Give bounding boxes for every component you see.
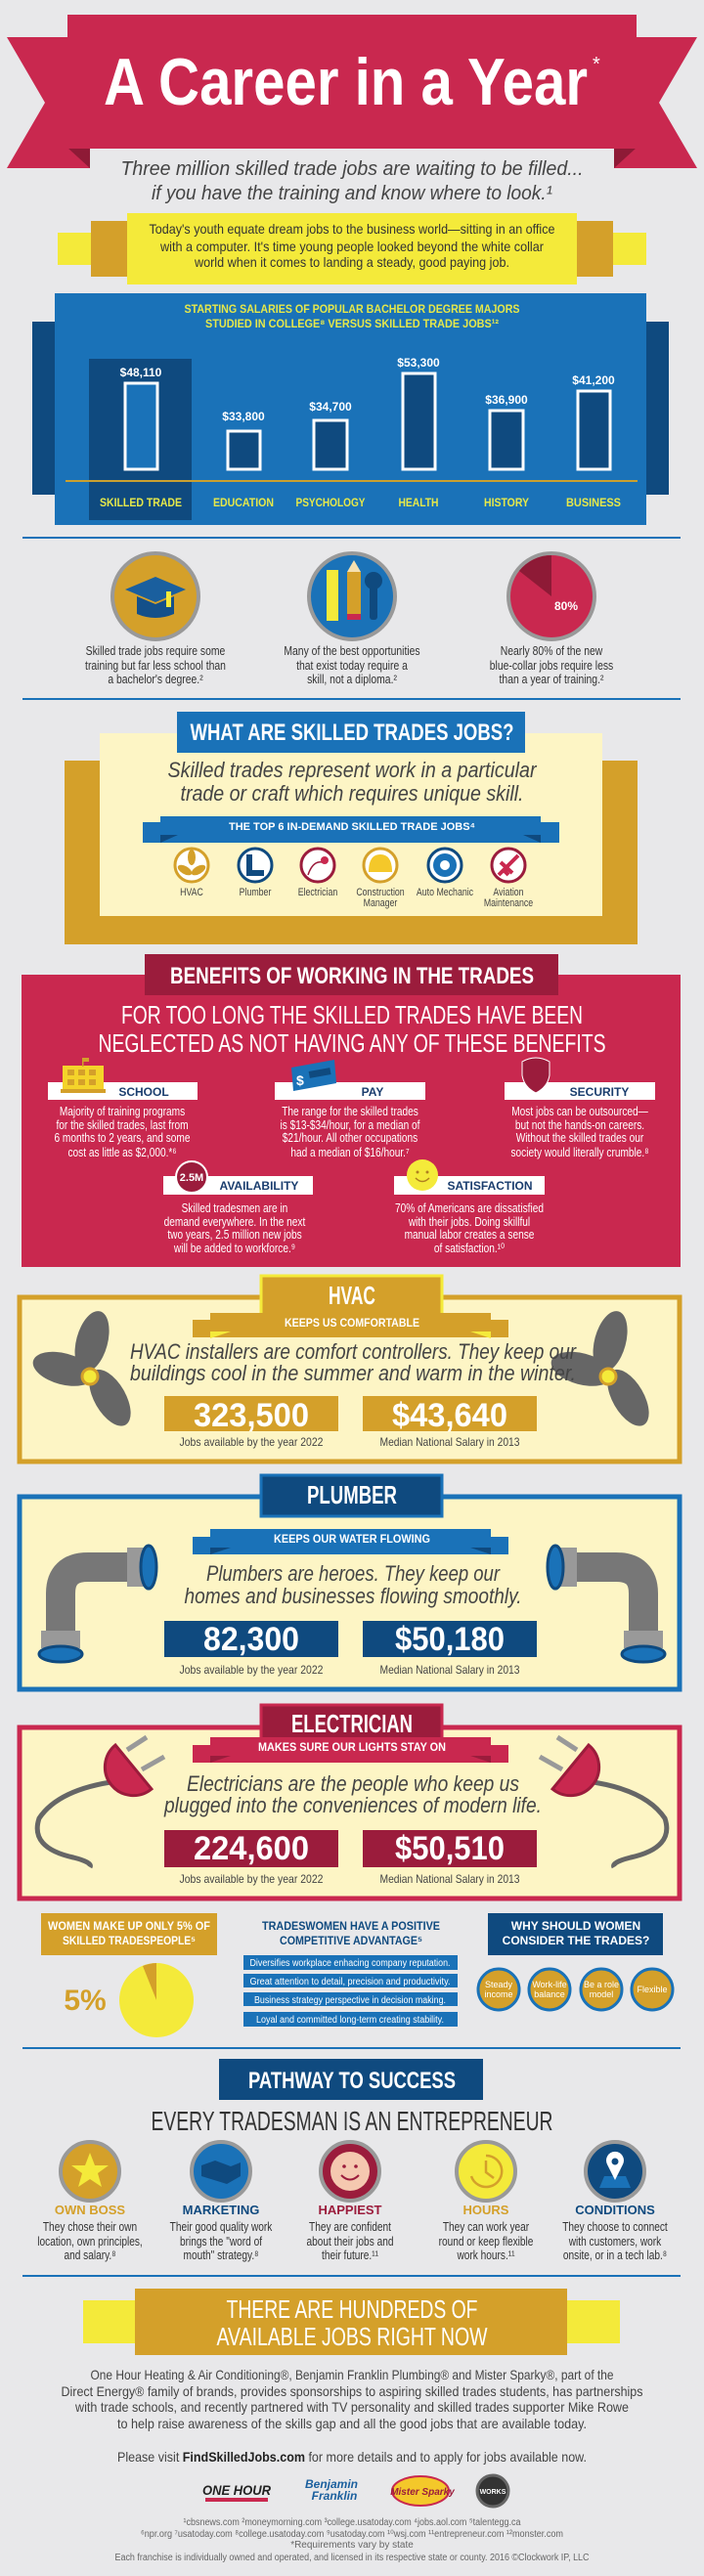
icons: six trades: Maintenance: [484, 897, 534, 909]
description: plugged into the conveniences of modern life.: [163, 1793, 542, 1817]
header tab: KEEPS US COMFORTABLE: [285, 1316, 419, 1330]
benefit: availability: demand everywhere. In the next: [164, 1215, 306, 1229]
description: Plumbers are heroes. They keep our: [206, 1561, 501, 1586]
description: Electricians are the people who keep us: [187, 1771, 519, 1796]
bar chart: starting salaries: $53,300: [397, 356, 440, 370]
benefit: satisfaction: of satisfaction.¹⁰: [434, 1242, 505, 1255]
description: HVAC installers are comfort controllers. They keep our: [130, 1339, 577, 1364]
stat: graduation cap: a bachelor's degree.²: [108, 673, 203, 686]
benefit: availability: Skilled tradesmen are in: [182, 1201, 287, 1215]
subtitle: Three million skilled trade jobs are waiting to be filled...: [121, 158, 583, 180]
callout: hundreds of jobs: THERE ARE HUNDREDS OF: [227, 2294, 477, 2324]
header tab: [193, 1705, 508, 1763]
bar chart: starting salaries: PSYCHOLOGY: [295, 496, 366, 509]
header tab: [193, 1276, 508, 1338]
why women consider trades: balance: [534, 1989, 565, 1999]
sponsor paragraph: Direct Energy® family of brands, provides sponsorships to aspiring skilled trades students, has partnerships: [61, 2383, 643, 2399]
benefit: satisfaction: manual labor creates a sense: [405, 1228, 534, 1242]
pathway items: mouth" strategy.⁸: [184, 2249, 259, 2262]
tradeswomen advantages: COMPETITIVE ADVANTAGE⁵: [280, 1934, 422, 1947]
pathway items: They chose their own: [43, 2220, 137, 2234]
tradeswomen advantages: Business strategy perspective in decision making.: [254, 1995, 446, 2006]
pathway items: onsite, or in a tech lab.⁸: [563, 2249, 667, 2262]
benefit: pay: $21/hour. All other occupations: [283, 1131, 418, 1145]
description: buildings cool in the summer and warm in the winter.: [130, 1361, 576, 1385]
callout: hundreds of jobs: AVAILABLE JOBS RIGHT NOW: [217, 2322, 488, 2351]
icon: pipe left: [39, 1546, 156, 1662]
header tab: [193, 1475, 508, 1554]
tradeswomen advantages: TRADESWOMEN HAVE A POSITIVE: [262, 1919, 440, 1933]
benefit: satisfaction: with their jobs. Doing skillful: [408, 1215, 530, 1229]
panel: benefits: [22, 954, 681, 1267]
benefit: satisfaction: 70% of Americans are dissatisfied: [395, 1201, 544, 1215]
tradeswomen advantages: Diversifies workplace enhacing company reputation.: [250, 1958, 450, 1969]
header tab: PLUMBER: [307, 1480, 397, 1509]
pie chart 5%: [119, 1963, 194, 2037]
stats: Jobs available by the year 2022: [180, 1872, 324, 1886]
stat: 80% pie: 80%: [554, 599, 578, 613]
heading: [145, 954, 558, 995]
chart title: STUDIED IN COLLEGE⁸ VERSUS SKILLED TRADE JOBS¹²: [205, 317, 499, 330]
title banner: *: [593, 54, 600, 75]
women 5%: WOMEN MAKE UP ONLY 5% OF: [48, 1919, 210, 1933]
bar chart: starting salaries: $33,800: [222, 410, 265, 423]
stat: 80% pie: than a year of training.²: [500, 673, 604, 686]
stat: 80% pie: [490, 553, 613, 686]
description: [163, 1771, 542, 1817]
benefit: school: SCHOOL: [118, 1085, 169, 1099]
pathway items: CONDITIONS: [575, 2203, 655, 2217]
stat: tools: skill, not a diploma.²: [307, 673, 397, 686]
stats: $50,180: [395, 1621, 505, 1658]
heading: [177, 712, 525, 753]
title: A Career in a Year: [104, 45, 588, 119]
footnotes: Each franchise is individually owned and operated, and licensed in its respective state or county. 2016 ©Clockwork IP, LLC: [115, 2553, 589, 2563]
why women consider trades: model: [590, 1989, 613, 1999]
logos: ONE HOUR: [202, 2482, 272, 2498]
panel: plumber: [20, 1475, 680, 1689]
benefit: availability: [163, 1161, 313, 1255]
stats: Jobs available by the year 2022: [180, 1435, 324, 1449]
pathway items: OWN BOSS: [55, 2203, 125, 2217]
stats: Median National Salary in 2013: [379, 1663, 520, 1677]
stats: $43,640: [392, 1397, 507, 1434]
pathway items: Their good quality work: [170, 2220, 272, 2234]
benefit: pay: The range for the skilled trades: [282, 1105, 418, 1118]
benefit: availability: 2.5M: [180, 1172, 203, 1184]
headline: [98, 1000, 606, 1058]
benefit: pay: $: [296, 1072, 304, 1088]
icons: six trades: HVAC: [180, 887, 203, 898]
footnotes: [115, 2517, 589, 2563]
why women consider trades: Work-life: [532, 1980, 567, 1989]
pathway items: work hours.¹¹: [457, 2249, 515, 2262]
benefit: security: SECURITY: [570, 1085, 629, 1099]
bar chart: starting salaries: SKILLED TRADE: [100, 496, 182, 509]
intro yellow box: world when it comes to landing a steady, good paying job.: [194, 254, 509, 270]
icons: six trades: Construction: [356, 887, 405, 898]
benefit: school: Majority of training programs: [60, 1105, 185, 1118]
stats: [164, 1621, 537, 1677]
icons: six trades: Auto Mechanic: [417, 887, 473, 898]
stat: tools: [284, 553, 420, 686]
women 5%: [41, 1913, 217, 2037]
description: homes and businesses flowing smoothly.: [184, 1584, 522, 1608]
pathway items: about their jobs and: [307, 2235, 393, 2249]
why women consider trades: Be a role: [584, 1980, 619, 1989]
pathway items: [37, 2142, 668, 2262]
pathway items: They can work year: [443, 2220, 529, 2234]
intro yellow box: with a computer. It's time young people looked beyond the white collar: [159, 239, 544, 254]
benefit: pay: [275, 1060, 425, 1159]
subtitle: [121, 158, 583, 204]
why women consider trades: [478, 1913, 673, 2010]
tradeswomen advantages: Great attention to detail, precision and productivity.: [250, 1977, 450, 1987]
benefit: pay: had a median of $16/hour.⁷: [290, 1146, 410, 1159]
definition text: trade or craft which requires unique skill.: [180, 781, 524, 806]
stat: graduation cap: Skilled trade jobs require some: [86, 644, 226, 658]
bar chart: starting salaries: BUSINESS: [566, 496, 621, 509]
bar chart: starting salaries: $48,110: [120, 366, 162, 379]
pathway items: They are confident: [309, 2220, 392, 2234]
benefit: security: [505, 1058, 655, 1159]
pathway heading: [219, 2059, 483, 2100]
definition text: [168, 758, 538, 806]
footnotes: ⁶npr.org ⁷usatoday.com ⁸college.usatoday.com ⁹usatoday.com ¹⁰wsj.com ¹¹entrepreneur.com ¹²monster.com: [141, 2529, 563, 2540]
intro yellow box: Today's youth equate dream jobs to the business world—sitting in an office: [149, 221, 555, 237]
icons: six trades: Electrician: [298, 887, 337, 898]
women 5%: SKILLED TRADESPEOPLE⁵: [63, 1934, 196, 1947]
tradeswomen advantages: [243, 1919, 458, 2027]
icon: plug left: [37, 1737, 164, 1867]
benefit: school: cost as little as $2,000.*⁶: [67, 1146, 177, 1159]
pathway items: location, own principles,: [37, 2235, 143, 2249]
chart title: STARTING SALARIES OF POPULAR BACHELOR DEGREE MAJORS: [184, 302, 520, 316]
pathway items: their future.¹¹: [322, 2249, 378, 2262]
logos: [202, 2475, 508, 2507]
benefit: pay: is $13-$34/hour, for a median of: [281, 1118, 420, 1132]
bar chart: starting salaries: EDUCATION: [213, 496, 274, 509]
bar chart: starting salaries: $41,200: [572, 373, 615, 387]
why women consider trades: WHY SHOULD WOMEN: [511, 1919, 640, 1933]
benefit: school: [48, 1058, 198, 1159]
icons: six trades: Plumber: [240, 887, 272, 898]
stat: tools: Many of the best opportunities: [284, 644, 420, 658]
header tab: MAKES SURE OUR LIGHTS STAY ON: [258, 1740, 446, 1754]
icons: six trades: [175, 849, 534, 909]
why women consider trades: Flexible: [637, 1985, 668, 1994]
panel: HVAC: [20, 1276, 680, 1462]
icon: fan left: [29, 1307, 139, 1432]
benefit: availability: will be added to workforce.⁹: [173, 1242, 295, 1255]
stat: graduation cap: training but far less school than: [85, 659, 226, 673]
stats: [164, 1830, 537, 1886]
icons: six trades: Manager: [364, 897, 398, 909]
stat: 80% pie: blue-collar jobs require less: [490, 659, 613, 673]
heading: BENEFITS OF WORKING IN THE TRADES: [170, 963, 534, 989]
women 5%: 5%: [64, 1985, 107, 2017]
footnotes: *Requirements vary by state: [290, 2540, 414, 2551]
logos: Benjamin: [305, 2477, 358, 2491]
benefit: school: for the skilled trades, last from: [56, 1118, 189, 1132]
logos: Franklin: [312, 2489, 357, 2503]
pathway items: HOURS: [463, 2203, 509, 2217]
stat: 80% pie: Nearly 80% of the new: [501, 644, 603, 658]
benefit: security: society would literally crumble.⁸: [510, 1146, 649, 1159]
stat: tools: that exist today require a: [296, 659, 408, 673]
sponsor paragraph: One Hour Heating & Air Conditioning®, Benjamin Franklin Plumbing® and Mister Sparky®, part of the: [90, 2367, 614, 2382]
icon: fan right: [548, 1307, 657, 1432]
pathway items: round or keep flexible: [439, 2235, 533, 2249]
stats: Median National Salary in 2013: [379, 1872, 520, 1886]
stats: [164, 1396, 537, 1449]
why women consider trades: Steady: [485, 1980, 513, 1989]
sponsor paragraph: [61, 2367, 643, 2431]
header tab: HVAC: [329, 1281, 375, 1310]
footnotes: ¹cbsnews.com ²moneymorning.com ³college.usatoday.com ⁴jobs.aol.com ⁵talentegg.ca: [184, 2517, 521, 2528]
visit line: Please visit FindSkilledJobs.com for more details and to apply for jobs available now.: [117, 2449, 587, 2465]
callout: hundreds of jobs: [83, 2289, 620, 2355]
definition text: Skilled trades represent work in a particular: [168, 758, 538, 782]
pathway items: MARKETING: [183, 2203, 259, 2217]
bar chart: starting salaries: $34,700: [309, 400, 352, 414]
benefit: availability: two years, 2.5 million new jobs: [167, 1228, 302, 1242]
pathway items: HAPPIEST: [318, 2203, 382, 2217]
intro yellow box: [58, 213, 646, 284]
header tab: ELECTRICIAN: [291, 1709, 413, 1738]
panel: electrician: [20, 1705, 680, 1899]
benefit: school: 6 months to 2 years, and some: [54, 1131, 191, 1145]
why women consider trades: income: [484, 1989, 513, 1999]
stats: 323,500: [194, 1397, 309, 1434]
subtitle: if you have the training and know where to look.¹: [152, 183, 552, 204]
pathway heading: PATHWAY TO SUCCESS: [248, 2068, 456, 2094]
benefit: security: Most jobs can be outsourced—: [511, 1105, 648, 1118]
icon: plug right: [540, 1737, 667, 1867]
pathway items: and salary.⁸: [64, 2249, 116, 2262]
stats: $50,510: [395, 1830, 505, 1867]
panel: what are skilled trades jobs: [65, 712, 638, 944]
chart title: [184, 302, 520, 330]
description: [130, 1339, 577, 1385]
bar chart: starting salaries: $36,900: [485, 393, 528, 407]
logos: WORKS: [480, 2489, 506, 2496]
title banner: [7, 15, 697, 168]
header tab: KEEPS OUR WATER FLOWING: [274, 1532, 430, 1546]
pathway items: brings the "word of: [180, 2235, 263, 2249]
sponsor paragraph: with trade schools, and recently partnered with TV personality and skilled trades supporter Mike Rowe: [74, 2399, 629, 2415]
icons: six trades: Aviation: [493, 887, 524, 898]
pathway items: with customers, work: [568, 2235, 661, 2249]
why women consider trades: CONSIDER THE TRADES?: [503, 1934, 649, 1947]
stats: 224,600: [194, 1830, 309, 1867]
stats: Jobs available by the year 2022: [180, 1663, 324, 1677]
ribbon: top 6: THE TOP 6 IN-DEMAND SKILLED TRADE JOBS⁴: [229, 821, 475, 833]
bar chart: starting salaries: [32, 293, 669, 525]
tradeswomen advantages: Loyal and committed long-term creating stability.: [256, 2015, 444, 2026]
benefit: pay: PAY: [362, 1085, 383, 1099]
description: [184, 1561, 522, 1608]
benefit: satisfaction: SATISFACTION: [447, 1179, 533, 1193]
stats: 82,300: [203, 1621, 299, 1658]
heading: WHAT ARE SKILLED TRADES JOBS?: [190, 720, 514, 746]
ribbon: top 6: [143, 816, 559, 843]
benefit: availability: AVAILABILITY: [220, 1179, 298, 1193]
benefit: security: but not the hands-on careers.: [515, 1118, 644, 1132]
bar chart: starting salaries: HISTORY: [484, 496, 529, 509]
pathway items: They choose to connect: [562, 2220, 668, 2234]
bar chart: starting salaries: HEALTH: [399, 496, 438, 509]
icon: pipe right: [548, 1546, 665, 1662]
benefit: security: Without the skilled trades our: [516, 1131, 643, 1145]
stats: Median National Salary in 2013: [379, 1435, 520, 1449]
logos: Mister Sparky: [390, 2487, 455, 2498]
stat: graduation cap: [85, 553, 226, 686]
sponsor paragraph: to help raise awareness of the skills gap and all the good jobs that are available today.: [117, 2416, 587, 2431]
benefit: satisfaction: [394, 1159, 545, 1255]
